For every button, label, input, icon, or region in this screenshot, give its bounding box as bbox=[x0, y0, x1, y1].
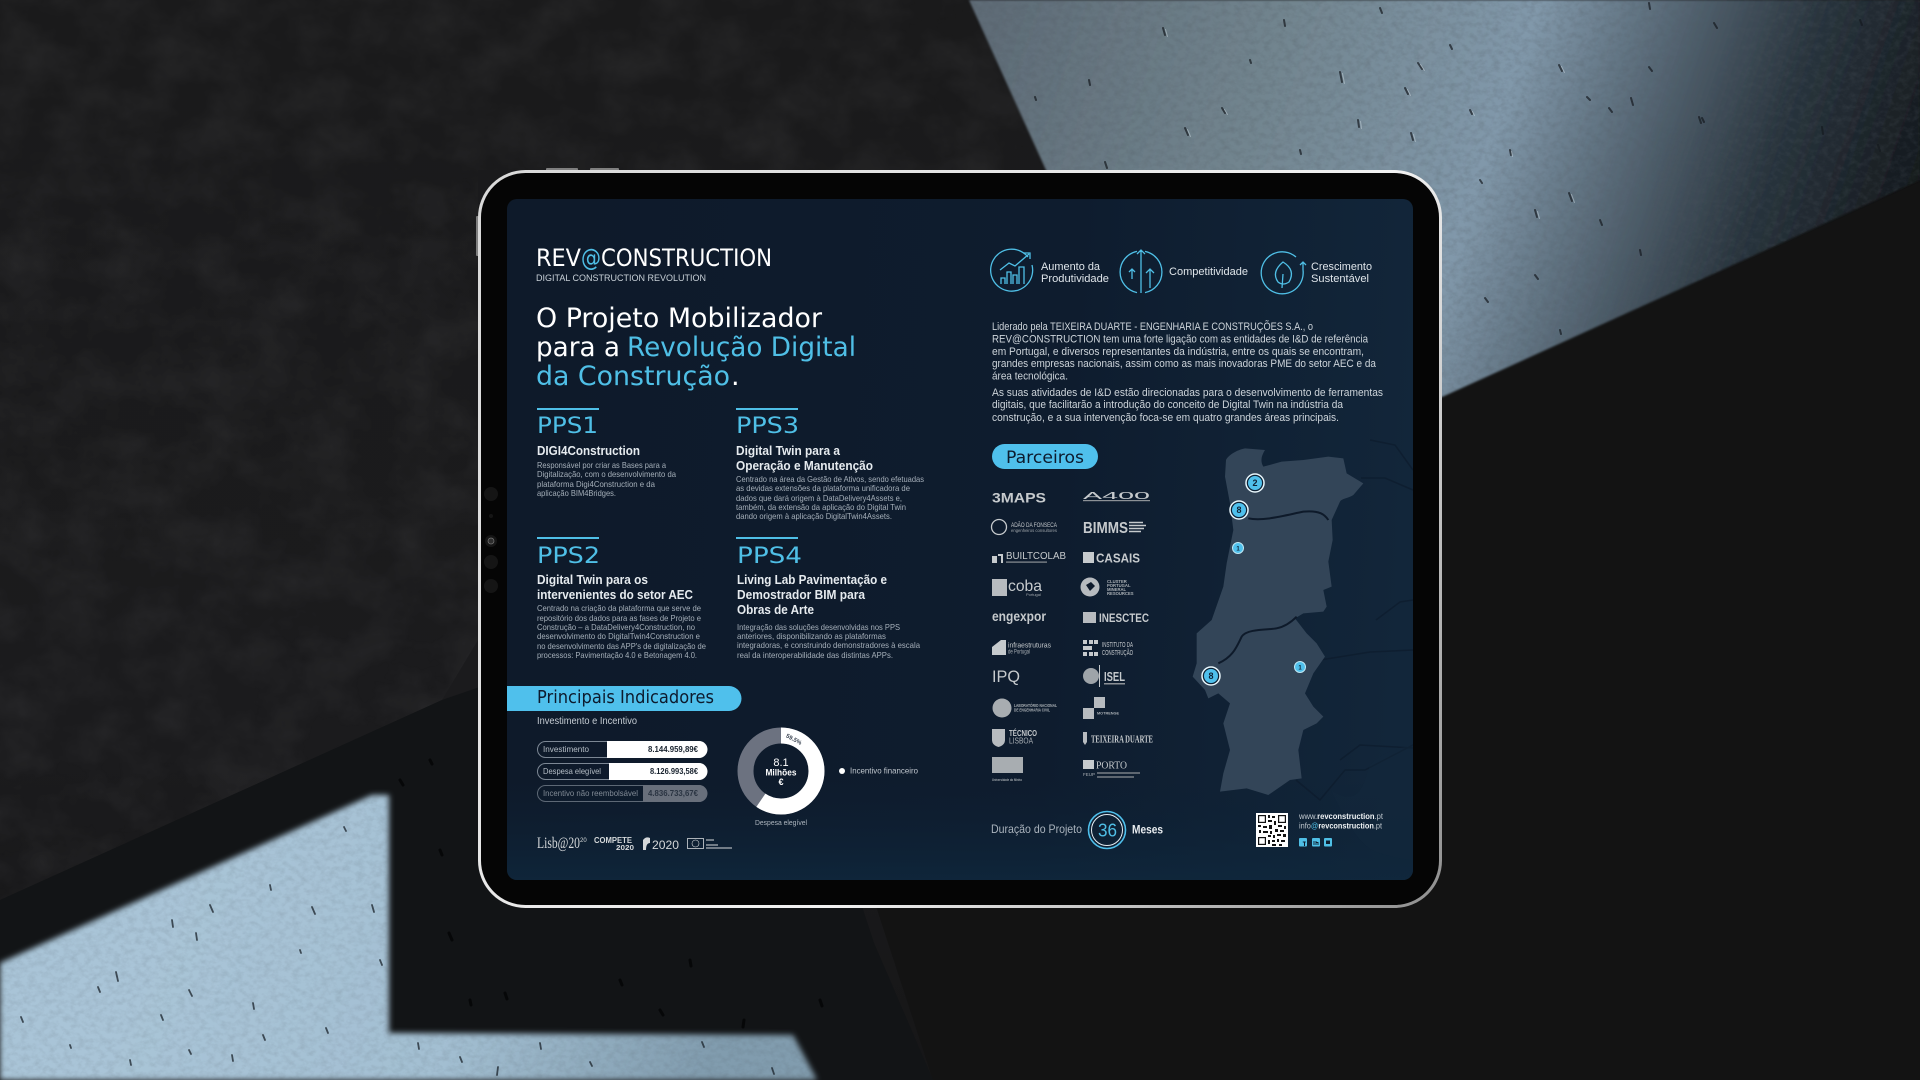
marker: 1 partner centre: 1 bbox=[1236, 546, 1240, 552]
logo: Adao da Fonseca bbox=[992, 520, 1058, 534]
section: PPS2: no desenvolvimento das APP's de digitalização de bbox=[537, 641, 706, 651]
logo: Coba bbox=[992, 578, 1042, 597]
logo: Instituto da Construcao bbox=[1083, 640, 1133, 657]
logo: A400: A400 bbox=[1083, 491, 1151, 502]
map: neighbouring land background bbox=[1296, 440, 1413, 800]
logo: Tecnico Lisboa: LISBOA bbox=[1009, 736, 1034, 746]
main heading: O Projeto Mobilizador bbox=[536, 303, 823, 334]
background: lit concrete wall top right bbox=[960, 0, 1920, 400]
logo: REV@CONSTRUCTION: @ bbox=[581, 244, 601, 272]
bar: Incentivo nao reembolsavel: 4.836.733,67€ bbox=[648, 788, 698, 798]
icon: competitiveness arrows bbox=[1120, 250, 1162, 293]
logo: Tecnico Lisboa: TÉCNICO bbox=[1009, 729, 1037, 738]
logo: Portugal 2020: 2020 bbox=[652, 838, 679, 852]
section: PPS3: Centrado na área da Gestão de Ativos, sendo efetuadas bbox=[736, 474, 924, 484]
map of Portugal with partner counts bbox=[1193, 448, 1363, 795]
icon: sustainable growth leaf bbox=[1261, 252, 1306, 294]
main heading: da Construção bbox=[536, 361, 730, 392]
paragraph: project description bbox=[992, 320, 1383, 424]
logo: REV@CONSTRUCTION: REV bbox=[536, 244, 582, 272]
pill heading: Parceiros: Parceiros bbox=[1006, 448, 1084, 468]
logo: Infraestruturas de Portugal: de Portugal bbox=[1008, 650, 1030, 656]
section: PPS1: Responsável por criar as Bases para a bbox=[537, 460, 666, 470]
section: PPS2: desenvolvimento do DigitalTwin4Construction e bbox=[537, 631, 700, 641]
main heading bbox=[536, 303, 856, 392]
web address: www.revconstruction.pt bbox=[1298, 811, 1384, 821]
logo: Compete 2020 bbox=[594, 836, 634, 852]
logo: FEUP Porto: FEUP bbox=[1083, 772, 1095, 777]
section: PPS3: dando origem à aplicação DigitalTwin4Assets. bbox=[736, 511, 892, 521]
main heading: Revolução Digital bbox=[627, 332, 856, 363]
logo: Cluster Portugal Mineral Resources bbox=[1080, 578, 1134, 596]
logo: Infraestruturas de Portugal: infraestruturas bbox=[1008, 642, 1051, 650]
paragraph: project description: As suas atividades de I&D estão direcionadas para o desenvolvimento de ferramentas bbox=[992, 387, 1383, 399]
logo: LNEC bbox=[992, 698, 1057, 718]
logo: A400 bbox=[1083, 491, 1151, 502]
screen panel bbox=[507, 199, 1413, 880]
logo: Cluster Portugal Mineral Resources: RESOURCES bbox=[1107, 591, 1134, 596]
logo: FEUP Porto: PORTO bbox=[1096, 760, 1127, 772]
section: PPS3 bbox=[736, 408, 924, 521]
logo: ISEL bbox=[1083, 665, 1125, 687]
contacts and social icons bbox=[1298, 811, 1384, 846]
logo: Infraestruturas de Portugal bbox=[992, 640, 1051, 656]
section: PPS2 bbox=[537, 537, 706, 660]
icons: facebook, linkedin, youtube bbox=[1299, 838, 1332, 846]
logo: Universidade do Minho: Universidade do Minho bbox=[992, 778, 1022, 782]
logo: European Union bbox=[688, 838, 732, 848]
project duration: 36 bbox=[1098, 820, 1117, 840]
section: PPS1: aplicação BIM4Bridges. bbox=[537, 488, 616, 498]
marker: 8 partners north: 8 bbox=[1236, 505, 1242, 515]
main heading: para a bbox=[536, 332, 620, 363]
logo: Coba: coba bbox=[1008, 578, 1042, 595]
tablet device bbox=[476, 168, 1440, 906]
bar: Investimento: Investimento bbox=[543, 744, 589, 754]
bezel camera dots bbox=[484, 487, 498, 593]
paragraph: project description: construção, e a sua intervenção foca-se em quatro grandes áreas principais. bbox=[992, 412, 1339, 424]
main heading: . bbox=[731, 361, 740, 392]
section: PPS1: Digitalização, com o desenvolvimento da bbox=[537, 469, 676, 479]
text: Crescimento Sustentavel bbox=[1311, 261, 1372, 285]
logo: Instituto da Construcao: CONSTRUÇÃO bbox=[1102, 648, 1133, 657]
paragraph: project description: grandes empresas nacionais, assim como as mais inovadoras PME do setor AEC e da bbox=[992, 358, 1377, 370]
donut chart: 59.5% of 8.1 million: 8.1 bbox=[773, 757, 789, 769]
donut chart: 59.5% of 8.1 million: 59.5% bbox=[785, 733, 803, 747]
section: PPS2: intervenientes do setor AEC bbox=[537, 587, 694, 602]
text: Aumento da Produtividade: Aumento da bbox=[1041, 261, 1101, 273]
logo: 3MAPS: 3MAPS bbox=[992, 490, 1046, 506]
pill heading: Parceiros bbox=[992, 444, 1098, 469]
bar: Investimento: 8.144.959,89€ bbox=[648, 744, 698, 754]
section: PPS3: Operação e Manutenção bbox=[736, 458, 873, 473]
section: PPS3: dados que dará origem à DataDelivery4Assets e, bbox=[736, 493, 902, 503]
logo: Universidade do Minho bbox=[992, 757, 1023, 782]
logo: INESC TEC bbox=[1083, 611, 1149, 625]
email address: info@revconstruction.pt bbox=[1299, 820, 1383, 830]
text: Crescimento Sustentavel: Sustentável bbox=[1311, 273, 1369, 285]
logo: FEUP Porto bbox=[1083, 760, 1140, 777]
donut chart: 59.5% of 8.1 million bbox=[746, 733, 816, 827]
background: dark concrete surface bbox=[0, 0, 1020, 878]
map shape bbox=[1193, 448, 1363, 795]
donut chart: 59.5% of 8.1 million: Despesa elegível bbox=[755, 818, 807, 827]
project duration bbox=[991, 812, 1163, 848]
section: PPS2: PPS2 bbox=[537, 544, 600, 569]
section: PPS1: plataforma Digi4Construction e da bbox=[537, 479, 655, 489]
marker: 2 partners: 2 bbox=[1252, 478, 1258, 488]
section: PPS3: as devidas extensões da plataforma unificadora de bbox=[736, 483, 910, 493]
logo: BuiltCoLAB: BUILTCOLAB bbox=[1006, 551, 1066, 562]
paragraph: project description: REV@CONSTRUCTION tem uma forte ligação com as entidades de I&D de referência bbox=[992, 334, 1369, 346]
section: PPS1: DIGI4Construction bbox=[537, 443, 640, 458]
funding logos bbox=[537, 835, 732, 852]
logo: Casais: CASAIS bbox=[1096, 550, 1140, 566]
logo: Coba: Portugal bbox=[1026, 592, 1041, 597]
section: PPS4: PPS4 bbox=[737, 544, 802, 569]
section: PPS2: processos: Pavimentação 4.0 e Betonagem 4.0. bbox=[537, 650, 697, 660]
logo: Lisboa 2020: Lisb@20 bbox=[537, 835, 580, 852]
logo: Teixeira Duarte: TEIXEIRA DUARTE bbox=[1091, 734, 1153, 746]
project duration: Meses bbox=[1132, 824, 1163, 836]
section: PPS4: Demostrador BIM para bbox=[737, 587, 866, 602]
section: PPS2: Centrado na criação da plataforma que serve de bbox=[537, 603, 701, 613]
section: PPS1: PPS1 bbox=[537, 414, 598, 439]
bars: investment figures bbox=[538, 741, 708, 802]
logo: Adao da Fonseca: ADÃO DA FONSECA bbox=[1011, 522, 1057, 529]
marker: 1 partner Alentejo: 1 bbox=[1298, 666, 1302, 672]
marker: 8 partners north bbox=[1230, 501, 1248, 519]
partner logos grid bbox=[992, 490, 1153, 782]
section: PPS1 bbox=[537, 408, 676, 498]
bar: Incentivo nao reembolsavel: Incentivo não reembolsável bbox=[543, 788, 638, 798]
logo: Cluster Portugal Mineral Resources: CLUSTER bbox=[1107, 579, 1127, 584]
section: PPS3: Digital Twin para a bbox=[736, 443, 841, 458]
logo: Cluster Portugal Mineral Resources: MINERAL bbox=[1107, 587, 1127, 592]
logo: ISEL: ISEL bbox=[1104, 669, 1125, 684]
logo: LNEC: DE ENGENHARIA CIVIL bbox=[1014, 708, 1050, 712]
bar: Despesa elegivel bbox=[538, 763, 708, 780]
marker: 8 partners Lisbon bbox=[1202, 667, 1220, 685]
section: PPS4 bbox=[736, 537, 920, 660]
logo: Compete 2020: COMPETE bbox=[594, 836, 633, 845]
logo: Instituto da Construcao: INSTITUTO DA bbox=[1102, 640, 1133, 649]
text: Competitividade: Competitividade bbox=[1169, 266, 1248, 278]
logo: Compete 2020: 2020 bbox=[616, 843, 634, 852]
QR code bbox=[1256, 813, 1288, 847]
text: Crescimento Sustentavel: Crescimento bbox=[1311, 261, 1372, 273]
logo: squares partner bbox=[1083, 697, 1119, 719]
bar: Despesa elegivel: Despesa elegível bbox=[543, 766, 601, 776]
section: PPS4: real da interoperabilidade das distintas APPs. bbox=[737, 650, 893, 660]
paragraph: project description: Liderado pela TEIXEIRA DUARTE - ENGENHARIA E CONSTRUÇÕES S.A., o bbox=[992, 320, 1313, 333]
logo: Adao da Fonseca: engenheiros consultores bbox=[1011, 528, 1058, 533]
logo: LNEC: LABORATÓRIO NACIONAL bbox=[1014, 703, 1057, 708]
section: PPS2: repositório dos dados para as fases de Projeto e bbox=[537, 613, 701, 623]
text: Aumento da Produtividade bbox=[1041, 261, 1109, 285]
logo: IPQ: IPQ bbox=[992, 667, 1020, 686]
legend: Incentivo financeiro: Incentivo financeiro bbox=[850, 766, 918, 776]
logo: BIMMS: BIMMS bbox=[1083, 520, 1128, 537]
logo: REV@CONSTRUCTION: DIGITAL CONSTRUCTION REVOLUTION bbox=[536, 273, 706, 283]
marker: 1 partner centre bbox=[1232, 542, 1244, 554]
icon: productivity chart bbox=[991, 249, 1033, 291]
marker: 2 partners bbox=[1246, 474, 1264, 492]
donut chart: 59.5% of 8.1 million: € bbox=[778, 777, 784, 787]
bar: Incentivo nao reembolsavel bbox=[538, 785, 708, 802]
donut chart: 59.5% of 8.1 million: Milhões bbox=[766, 768, 796, 778]
text: Aumento da Produtividade: Produtividade bbox=[1041, 273, 1109, 285]
background: dark shadow band bottom left bbox=[0, 680, 933, 1080]
logo: Cluster Portugal Mineral Resources: PORTUGAL bbox=[1107, 583, 1131, 588]
section: PPS4: integradoras, e construindo demonstradores à escala bbox=[737, 640, 920, 650]
section: PPS4: Living Lab Pavimentação e bbox=[737, 572, 887, 587]
banner: Principais Indicadores: Principais Indicadores bbox=[537, 687, 714, 708]
paragraph: project description: em Portugal, e diversos representantes da indústria, entre os quais se encontram, bbox=[992, 346, 1364, 358]
section: PPS2: Digital Twin para os bbox=[537, 572, 648, 587]
marker: 1 partner Alentejo bbox=[1294, 662, 1306, 672]
paragraph: project description: área tecnológica. bbox=[992, 370, 1068, 382]
section: PPS2: Construção – a DataDelivery4Construction, no bbox=[537, 622, 695, 632]
section: PPS4: Obras de Arte bbox=[737, 602, 814, 617]
paragraph: project description: digitais, que facilitarão a introdução do conceito de Digital Twin na indústria da bbox=[992, 399, 1344, 411]
section: PPS3: PPS3 bbox=[736, 414, 799, 439]
bar: Investimento bbox=[538, 741, 708, 758]
logo: REV@CONSTRUCTION bbox=[536, 244, 772, 283]
logo: INESC TEC: INESCTEC bbox=[1099, 611, 1149, 625]
section: PPS3: também, da extensão da aplicação do Digital Twin bbox=[736, 502, 906, 512]
tablet side buttons bbox=[476, 168, 619, 256]
background: lit concrete floor bottom left bbox=[0, 780, 830, 1080]
funding logos: 20 bbox=[580, 838, 587, 844]
logo: squares partner: MOTRENGE bbox=[1097, 710, 1119, 716]
subheading: Investimento e Incentivo: Investimento e Incentivo bbox=[537, 716, 637, 727]
marker: 8 partners Lisbon: 8 bbox=[1208, 671, 1214, 681]
logo: REV@CONSTRUCTION: CONSTRUCTION bbox=[601, 244, 772, 272]
section: PPS4: anteriores, disponibilizando as plataformas bbox=[737, 631, 886, 641]
project duration: Duração do Projeto bbox=[991, 822, 1082, 836]
logo: Engexpor: engexpor bbox=[992, 609, 1047, 624]
bar: Despesa elegivel: 8.126.993,58€ bbox=[650, 766, 698, 776]
logo: Teixeira Duarte bbox=[1083, 732, 1153, 746]
benefit icons row bbox=[991, 249, 1372, 294]
section: PPS4: Integração das soluções desenvolvidas nos PPS bbox=[737, 622, 900, 632]
logo: Tecnico Lisboa bbox=[992, 729, 1037, 747]
